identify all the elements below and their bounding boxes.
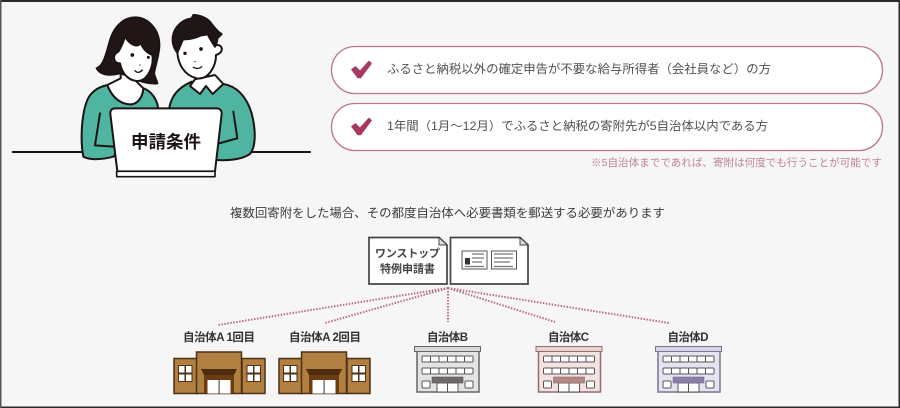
icon: building D <box>656 346 722 392</box>
label: municipality C: 自治体C <box>548 330 589 344</box>
icon: check mark <box>352 62 371 78</box>
table line <box>13 149 310 155</box>
document: one-stop form: 特例申請書 <box>380 262 435 276</box>
label: municipality A first: 自治体A 1回目 <box>183 330 255 344</box>
connector lines <box>218 288 669 325</box>
label: municipality D: 自治体D <box>668 330 708 344</box>
panel: condition 2: 1年間（1月～12月）でふるさと納税の寄附先が5自治体以内である方 <box>387 118 768 133</box>
laptop <box>110 108 222 177</box>
man <box>169 15 255 160</box>
icon: building A first <box>174 352 265 394</box>
icon: building A second <box>279 352 370 394</box>
panel: condition 1: ふるさと納税以外の確定申告が不要な給与所得者（会社員など）の方 <box>387 61 771 76</box>
panel: condition 2 <box>332 104 882 150</box>
illustration: couple at a laptop <box>13 15 310 177</box>
icon: building C <box>536 346 602 392</box>
label: municipality B: 自治体B <box>427 330 468 344</box>
label: municipality A second: 自治体A 2回目 <box>289 330 361 344</box>
woman <box>82 17 159 159</box>
laptop label: 申請条件 <box>131 132 201 152</box>
icon: building B <box>414 346 480 392</box>
note: ※5自治体までであれば、寄附は何度でも行うことが可能です <box>591 156 882 169</box>
document: one-stop form <box>369 238 447 284</box>
panel: condition 1 <box>332 46 882 94</box>
document: one-stop form: ワンストップ <box>375 247 440 260</box>
heading: 複数回寄附をした場合、その都度自治体へ必要書類を郵送する必要があります <box>230 205 665 220</box>
document: ID cards <box>450 238 528 284</box>
icon: check mark <box>352 118 371 134</box>
